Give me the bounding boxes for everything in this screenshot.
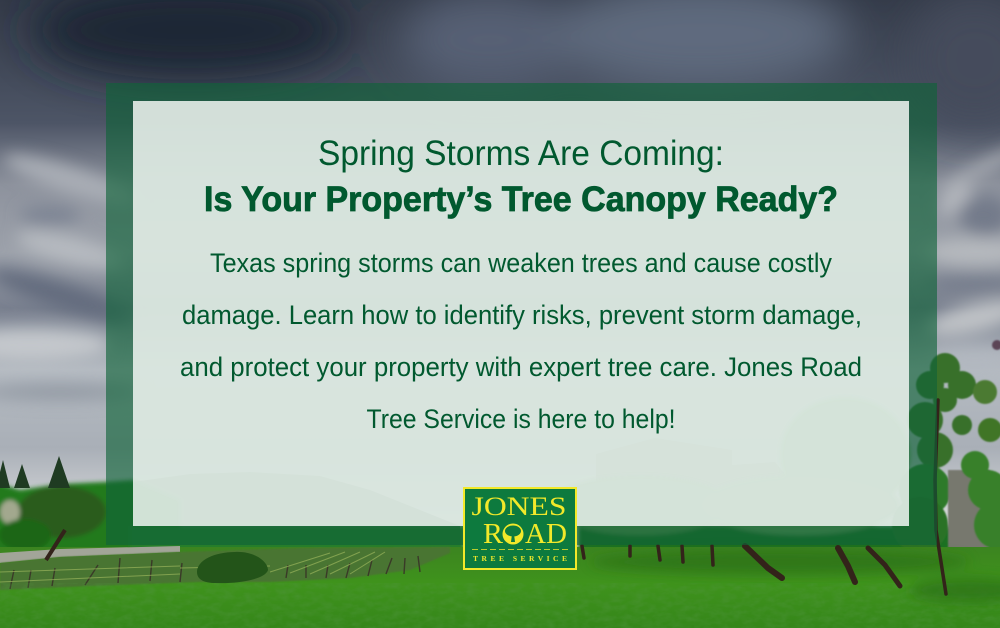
logo wordmark: AD (525, 519, 567, 550)
logo badge (464, 488, 576, 569)
stone wall (0, 546, 180, 563)
logo tree roundel (502, 524, 524, 544)
left tree trunk (46, 530, 65, 560)
body line two: damage. Learn how to identify risks, prevent storm damage, (182, 300, 862, 330)
trees at right edge (892, 340, 1000, 553)
logo: Jones Road Tree Service (464, 488, 576, 569)
logo wordmark: TREE SERVICE (473, 554, 567, 563)
background trees (0, 397, 1000, 556)
vineyard rows (0, 547, 450, 590)
foliage over stone wall (961, 451, 1000, 549)
tree trunks right (582, 400, 946, 594)
distant hill (133, 472, 460, 540)
logo dashed rule (472, 548, 568, 550)
lawn shading at right (590, 550, 1000, 602)
heading (204, 134, 838, 219)
stone building at right (948, 470, 990, 552)
lawn texture (0, 583, 1000, 628)
body text (180, 248, 862, 434)
bush (197, 552, 268, 583)
logo wordmark: JONES (472, 492, 566, 521)
logo wordmark: R (483, 519, 503, 550)
heading line two: Is Your Property’s Tree Canopy Ready? (204, 180, 838, 219)
logo wordmark (472, 492, 567, 563)
body line four: Tree Service is here to help! (366, 404, 676, 434)
body line one: Texas spring storms can weaken trees and cause costly (210, 248, 832, 278)
villa (596, 438, 790, 530)
heading line one: Spring Storms Are Coming: (318, 134, 724, 173)
dark conifers (0, 456, 70, 488)
body line three: and protect your property with expert tree care. Jones Road (180, 352, 862, 382)
panel: inner pale text card (133, 101, 909, 526)
panel: outer translucent green frame (106, 83, 937, 545)
lawn (0, 547, 1000, 628)
